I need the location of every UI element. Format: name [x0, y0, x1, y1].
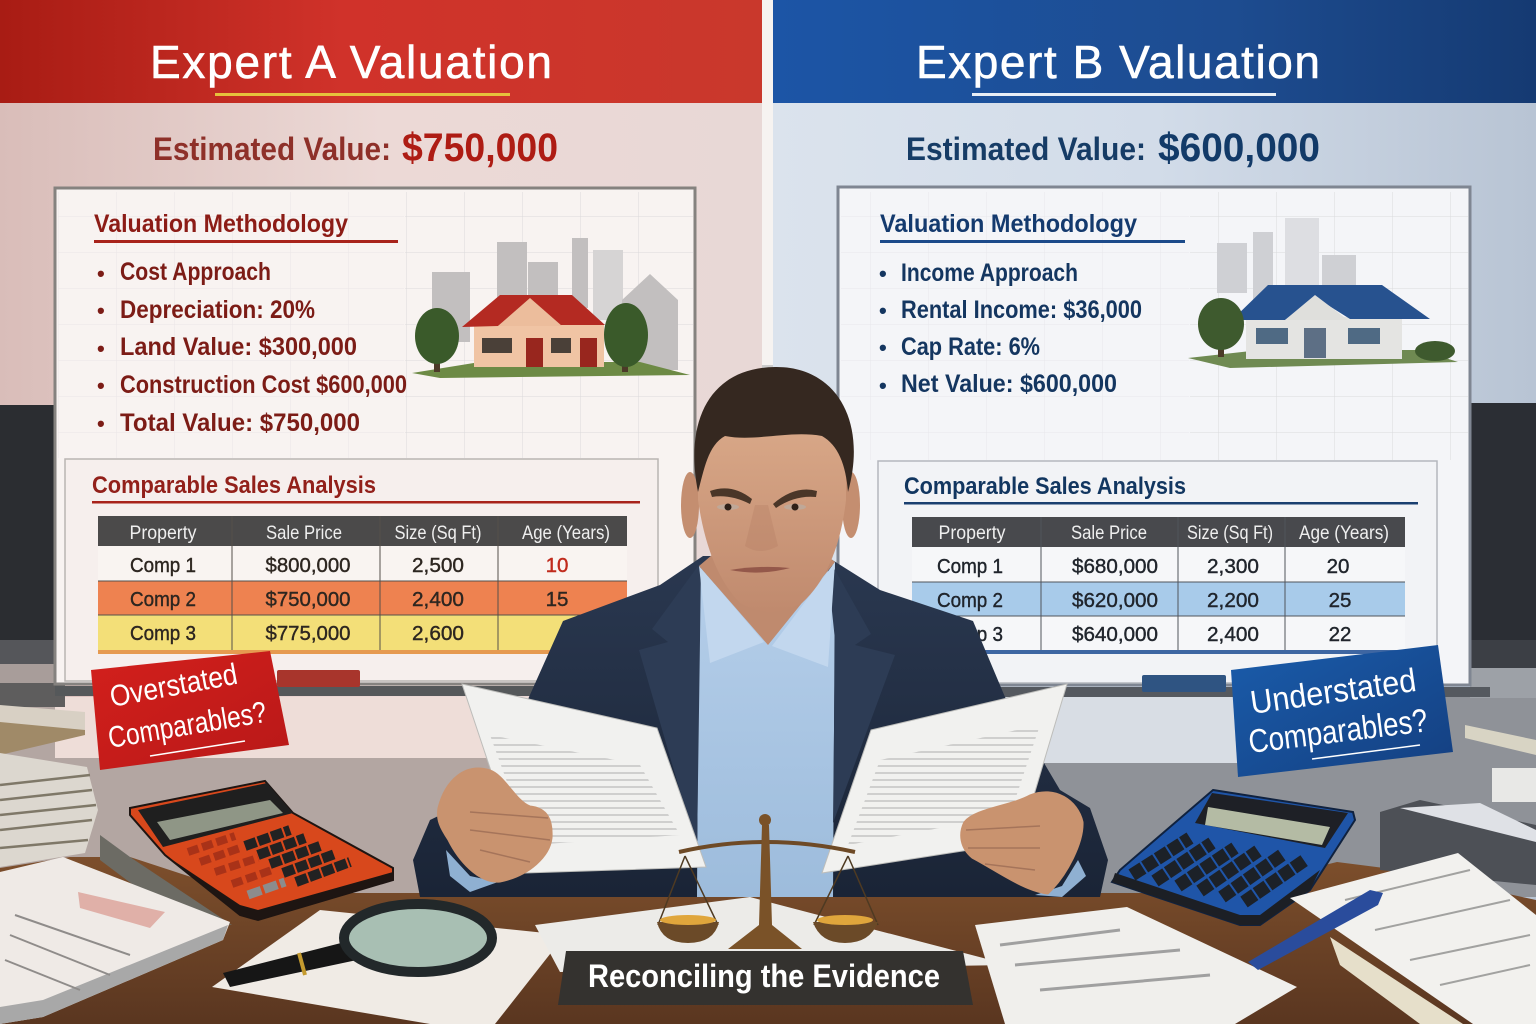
- table: comparable sales B: Size (Sq Ft): [1187, 523, 1273, 544]
- list: methodology B: Income Approach: [901, 259, 1078, 287]
- panel: Expert A background: [0, 103, 762, 1024]
- table: comparable sales B: Age (Years): [1299, 523, 1389, 544]
- neck: [699, 555, 835, 645]
- table: comparable sales B: $620,000: [1072, 589, 1158, 612]
- heading: methodology A: Valuation Methodology: [94, 210, 348, 238]
- table: comparable sales A: 2,500: [412, 554, 464, 577]
- heading: comparable sales B: Comparable Sales Analysis: [904, 473, 1186, 500]
- face: [698, 422, 846, 612]
- eyes: [717, 504, 806, 510]
- calculator: red: [130, 781, 393, 920]
- heading: methodology B: Valuation Methodology: [880, 210, 1137, 238]
- list: methodology B: •: [879, 335, 887, 360]
- table: comparable sales B: Sale Price: [1071, 523, 1147, 544]
- panel: comparable sales A: [65, 459, 658, 681]
- desk: [0, 857, 1536, 1024]
- dark monitor left: [0, 405, 65, 707]
- paper stacks left: [0, 705, 232, 1024]
- eyebrows: [710, 488, 817, 508]
- table: comparable sales A: 2,400: [412, 588, 464, 611]
- table: comparable sales A: $750,000: [266, 588, 350, 611]
- estimated value A: Estimated Value:: [153, 131, 391, 167]
- estimated value B: $600,000: [1158, 126, 1320, 170]
- calculator: blue: [1112, 790, 1355, 925]
- board tray right: [830, 687, 1490, 697]
- illustration: red-roof house: [412, 238, 690, 378]
- list: methodology A: •: [97, 298, 105, 323]
- marker right: [1142, 675, 1226, 692]
- table: comparable sales B: 25: [1329, 589, 1351, 612]
- table: comparable sales B: 22: [1329, 623, 1351, 646]
- board tray left: [55, 686, 755, 696]
- table: comparable sales B: Comp 2: [937, 589, 1003, 612]
- list: methodology A: Total Value: $750,000: [120, 409, 360, 437]
- list: methodology A: Depreciation: 20%: [120, 296, 315, 324]
- lower board reflection right: [830, 697, 1250, 763]
- left hand: [437, 768, 552, 882]
- banner: Reconciling the Evidence: Reconciling the Evidence: [588, 958, 940, 994]
- list: methodology A: •: [97, 336, 105, 361]
- table: comparable sales B: 2,300: [1207, 555, 1259, 578]
- cuff left: [446, 850, 498, 892]
- list: methodology A: •: [97, 261, 105, 286]
- list: methodology A: Cost Approach: [120, 258, 271, 286]
- table: comparable sales A: $775,000: [266, 622, 350, 645]
- dark monitor right: [1470, 403, 1536, 698]
- list: methodology A: •: [97, 373, 105, 398]
- table: comparable sales A: 2,600: [412, 622, 464, 645]
- shirt: [697, 562, 835, 897]
- table: comparable sales A: Comp 1: [130, 554, 196, 577]
- list: methodology B: Cap Rate: 6%: [901, 333, 1040, 361]
- table: comparable sales A: 15: [546, 588, 568, 611]
- callout: Understated Comparables: Understated: [1248, 661, 1418, 721]
- banner: Reconciling the Evidence: [558, 951, 973, 1005]
- list: methodology A: [97, 258, 407, 437]
- estimated value B: Estimated Value:: [906, 131, 1146, 167]
- table: comparable sales A: Age (Years): [522, 523, 610, 544]
- table: comparable sales A: Comp 3: [130, 622, 196, 645]
- document right: [822, 684, 1067, 873]
- lapel right: [826, 554, 895, 823]
- table: comparable sales B: Comp 3: [937, 623, 1003, 646]
- ears: [681, 472, 860, 538]
- paper stacks right: [1380, 725, 1536, 885]
- panel: Expert B background: [773, 103, 1536, 1024]
- table: comparable sales B: [912, 517, 1405, 654]
- title: Expert A Valuation: Expert A Valuation: [150, 36, 552, 88]
- table: comparable sales A: $800,000: [266, 554, 350, 577]
- list: methodology B: [879, 259, 1142, 398]
- magnifying glass: [223, 904, 492, 987]
- wall left: [0, 697, 768, 897]
- document left: [462, 684, 706, 873]
- callout: Overstated Comparables: [91, 651, 289, 770]
- table: comparable sales B: $680,000: [1072, 555, 1158, 578]
- list: methodology B: •: [879, 298, 887, 323]
- table: comparable sales B: $640,000: [1072, 623, 1158, 646]
- wall right: [768, 697, 1536, 897]
- list: methodology A: Land Value: $300,000: [120, 333, 357, 361]
- table: comparable sales B: 2,200: [1207, 589, 1259, 612]
- table: comparable sales A: Sale Price: [266, 523, 342, 544]
- header: Expert B: [773, 0, 1536, 103]
- list: methodology B: Net Value: $600,000: [901, 370, 1117, 398]
- suit: [413, 556, 1108, 897]
- list: methodology B: •: [879, 373, 887, 398]
- lower board reflection left: [55, 697, 715, 758]
- table: comparable sales B: Property: [938, 523, 1006, 544]
- title: Expert B Valuation: Expert B Valuation: [916, 36, 1320, 88]
- mouth: [730, 567, 790, 573]
- table: comparable sales A: [98, 516, 627, 654]
- list: methodology B: •: [879, 261, 887, 286]
- callout: Overstated Comparables: Comparables?: [106, 696, 269, 755]
- head: [681, 367, 860, 612]
- table: comparable sales A: Comp 2: [130, 588, 196, 611]
- table: comparable sales B: Comp 1: [937, 555, 1003, 578]
- callout: Overstated Comparables: Overstated: [107, 658, 240, 714]
- table: comparable sales A: 10: [546, 554, 568, 577]
- pen: [1248, 890, 1383, 970]
- callout: Understated Comparables: [1231, 645, 1453, 777]
- list: methodology A: Construction Cost $600,000: [120, 371, 407, 399]
- documents on desk: [212, 853, 1536, 1024]
- marker left: [277, 670, 360, 687]
- cuff right: [1035, 860, 1086, 897]
- panel: board A: [55, 188, 695, 684]
- list: methodology A: •: [97, 411, 105, 436]
- table: comparable sales B: 2,400: [1207, 623, 1259, 646]
- divider: [762, 0, 773, 365]
- table: comparable sales A: Size (Sq Ft): [394, 523, 482, 544]
- scales of justice: [657, 814, 878, 949]
- panel: comparable sales B: [878, 461, 1437, 683]
- heading: comparable sales A: Comparable Sales Analysis: [92, 472, 376, 499]
- callout: Understated Comparables: Comparables?: [1246, 701, 1430, 760]
- collar: [699, 562, 835, 667]
- header: Expert A: [0, 0, 762, 103]
- estimated value B: [906, 126, 1320, 170]
- estimated value A: [153, 126, 558, 170]
- list: methodology B: Rental Income: $36,000: [901, 296, 1142, 324]
- panel: board B: [838, 187, 1470, 685]
- hair: [694, 367, 854, 492]
- illustration: blue-roof house: [1188, 218, 1458, 368]
- person: [413, 367, 1108, 897]
- lapel left: [639, 562, 701, 850]
- table: comparable sales A: Property: [130, 523, 197, 544]
- table: comparable sales B: 20: [1327, 555, 1349, 578]
- estimated value A: $750,000: [402, 126, 558, 170]
- right hand: [961, 792, 1083, 894]
- nose: [745, 505, 778, 551]
